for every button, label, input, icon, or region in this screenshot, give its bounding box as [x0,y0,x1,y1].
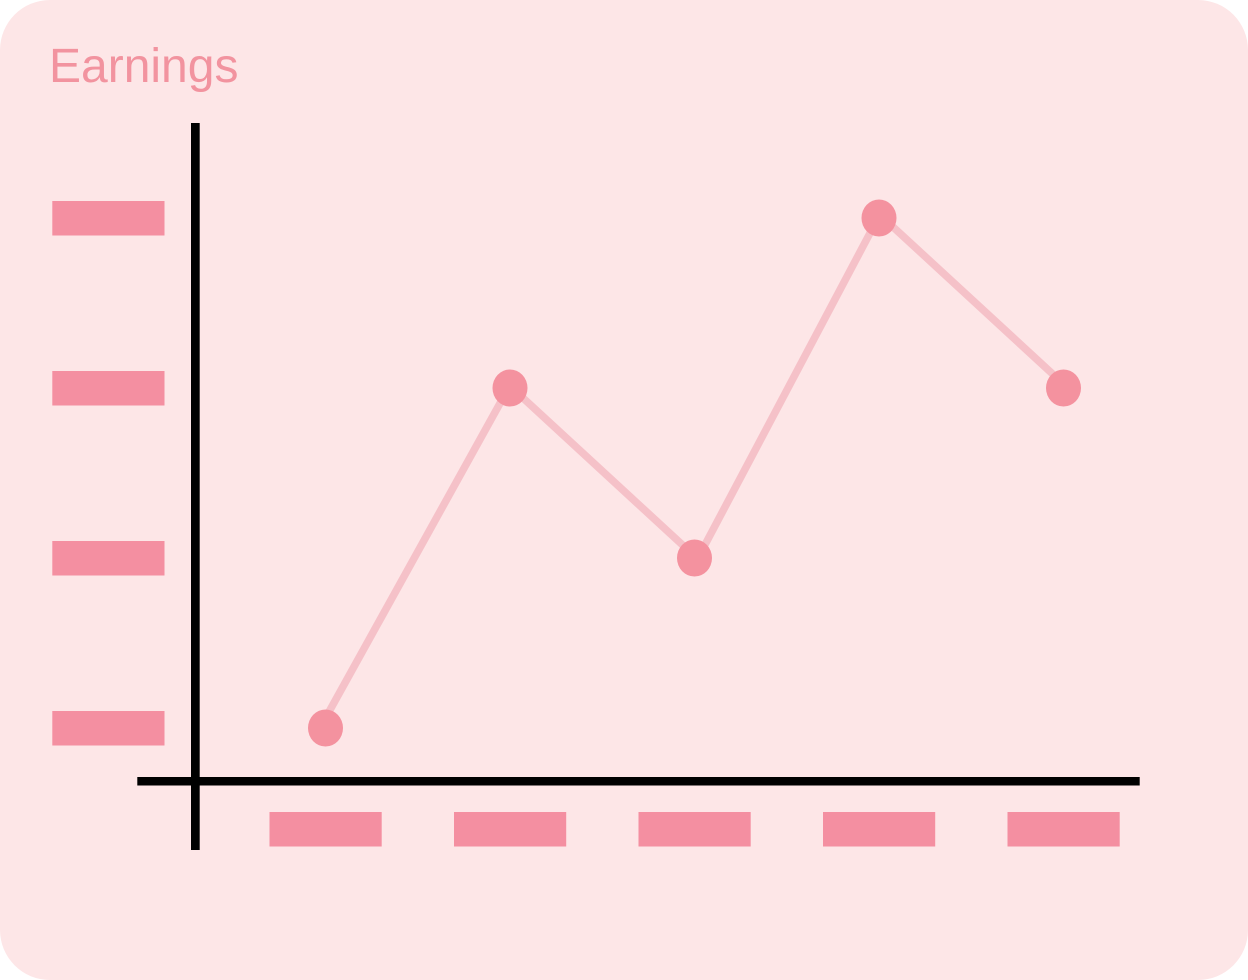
title: Earnings [49,40,238,93]
y-axis labels [52,201,164,746]
x-axis labels [270,812,1120,846]
line series [320,214,1064,728]
data points [308,200,1081,746]
chart axes [137,123,1140,850]
